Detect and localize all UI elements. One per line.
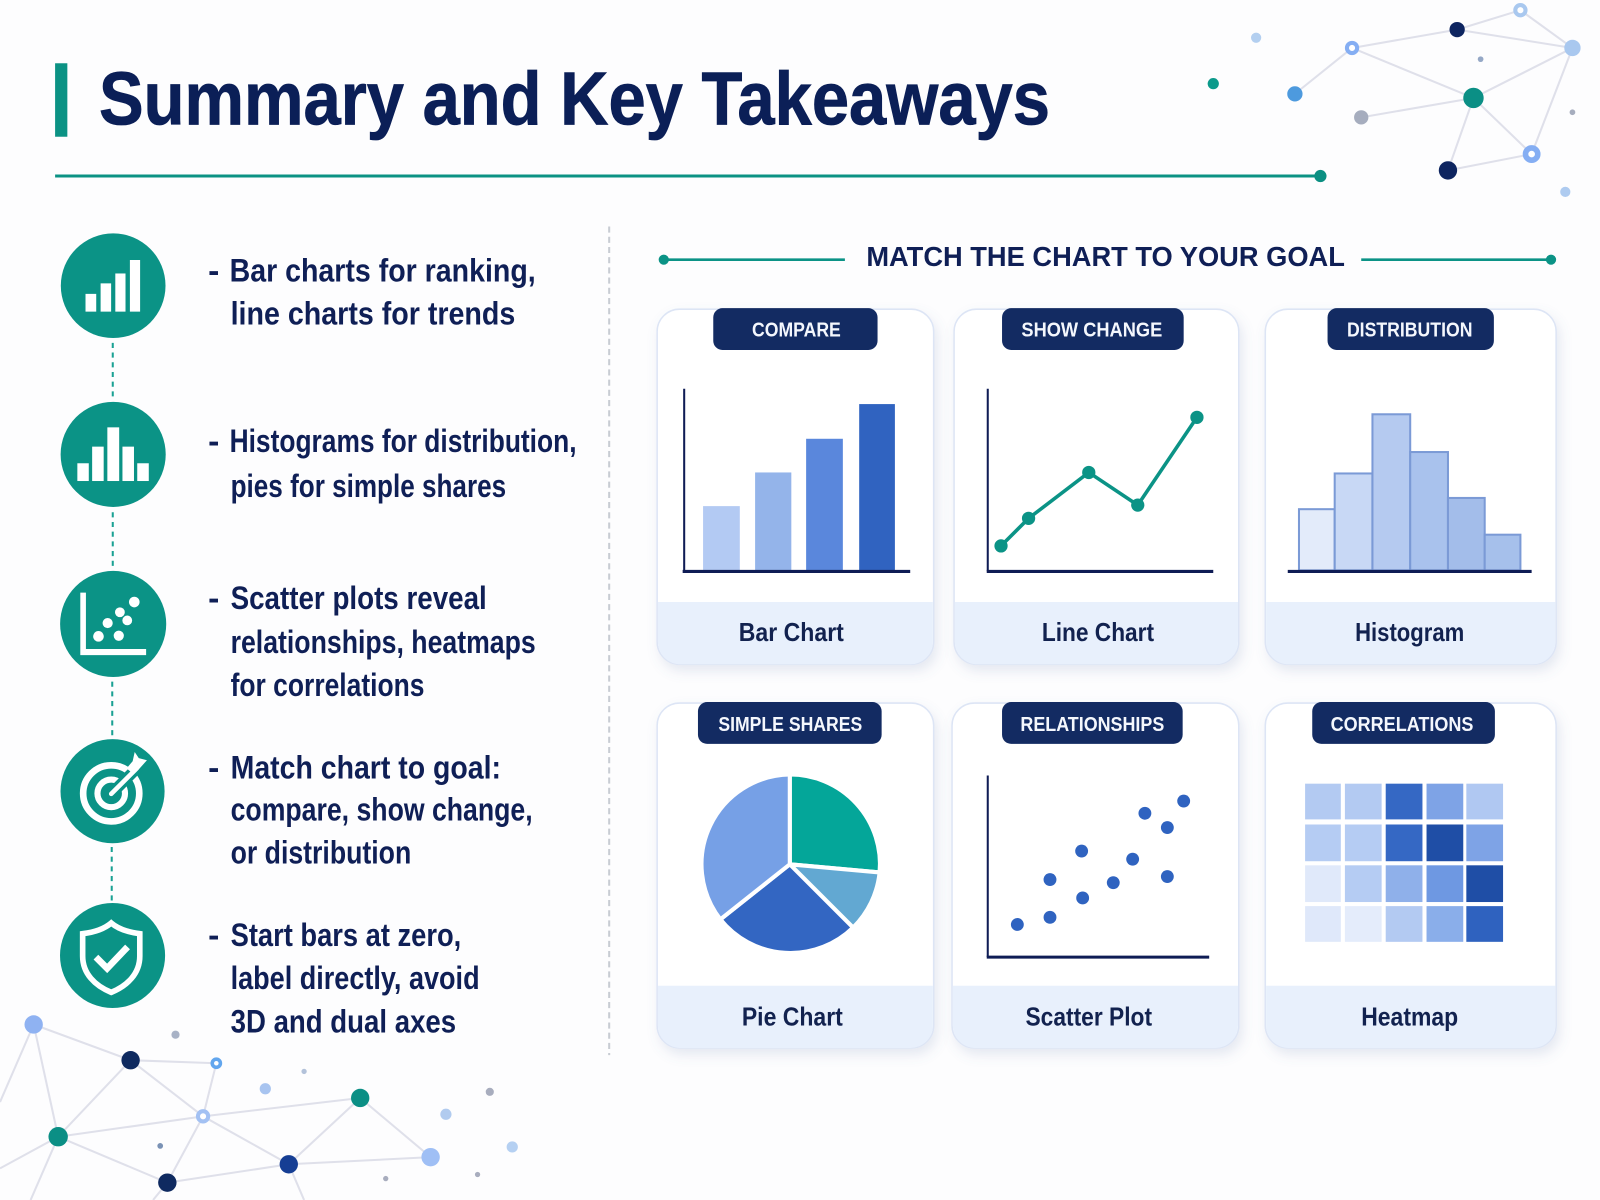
histogram (1288, 414, 1532, 571)
text (208, 749, 533, 870)
takeaway 3: icon and text (60, 571, 536, 703)
takeaway 2: icon and text (61, 402, 577, 507)
bar chart (683, 389, 910, 571)
text: 3D and dual axes (231, 1003, 456, 1040)
text: relationships, heatmaps (231, 623, 536, 660)
tag: compare: COMPARE (752, 320, 841, 342)
text: - (208, 252, 219, 289)
takeaway 1: icon and text (61, 233, 536, 338)
timeline connectors (112, 343, 113, 901)
network decoration: top right (1208, 5, 1581, 197)
label: Scatter Plot (1026, 1004, 1152, 1032)
tag: distribution: DISTRIBUTION (1347, 320, 1472, 342)
section heading: match the chart to your goal (659, 241, 1556, 272)
label: Pie Chart (742, 1004, 843, 1032)
icon: histogram (61, 402, 166, 507)
tag: correlations (1312, 702, 1495, 744)
column divider (608, 227, 610, 1055)
panel: heatmap card (1265, 702, 1556, 1048)
text: - (208, 579, 219, 616)
takeaway 4: icon and text (61, 739, 533, 870)
text: Histograms for distribution, (230, 422, 577, 459)
panel: histogram card (1265, 308, 1556, 664)
icon: scatter plot (60, 571, 166, 677)
panel: bar chart card (657, 308, 934, 664)
text: pies for simple shares (231, 467, 506, 504)
takeaway 5: icon and text (60, 903, 480, 1040)
text: Start bars at zero, (231, 916, 461, 953)
line chart (987, 389, 1213, 571)
text: line charts for trends (231, 294, 515, 331)
text: label directly, avoid (231, 959, 480, 996)
tag: show change: SHOW CHANGE (1021, 320, 1162, 342)
label: Heatmap (1361, 1004, 1458, 1032)
tag: relationships (1002, 702, 1183, 744)
panel: pie chart card (657, 702, 934, 1048)
text: - (208, 749, 219, 786)
text: Scatter plots reveal (231, 579, 487, 616)
tag: relationships: RELATIONSHIPS (1020, 714, 1164, 736)
text: - (208, 422, 219, 459)
title rule (55, 170, 1327, 182)
tag: correlations: CORRELATIONS (1331, 714, 1473, 736)
tag: compare (713, 308, 878, 350)
label: Line Chart (1042, 619, 1155, 647)
panel: scatter plot card (952, 702, 1239, 1048)
text (208, 422, 577, 504)
pie chart (702, 774, 880, 953)
label: Bar Chart (739, 619, 844, 647)
icon: shield with check (60, 903, 165, 1008)
text (208, 916, 480, 1040)
text: Match chart to goal: (231, 749, 501, 786)
title accent bar (55, 63, 67, 137)
tag: show change (1002, 308, 1184, 350)
label: Histogram (1355, 619, 1464, 647)
network decoration: bottom left (0, 1015, 518, 1200)
text (208, 579, 536, 703)
heatmap (1305, 784, 1503, 942)
scatter plot (987, 776, 1209, 957)
text: - (208, 916, 219, 953)
text: for correlations (231, 666, 424, 703)
section heading: match the chart to your goal: MATCH THE CHART TO YOUR GOAL (866, 241, 1345, 272)
tag: simple shares: SIMPLE SHARES (718, 714, 862, 736)
icon: bar chart (61, 233, 166, 338)
panel: line chart card (954, 308, 1239, 664)
text: or distribution (231, 833, 411, 870)
text: compare, show change, (231, 790, 533, 827)
tag: simple shares (698, 702, 882, 744)
title: Summary and Key Takeaways (99, 57, 1050, 141)
icon: target with arrow (61, 739, 165, 843)
tag: distribution (1328, 308, 1494, 350)
text (208, 252, 536, 331)
text: Bar charts for ranking, (230, 252, 536, 289)
